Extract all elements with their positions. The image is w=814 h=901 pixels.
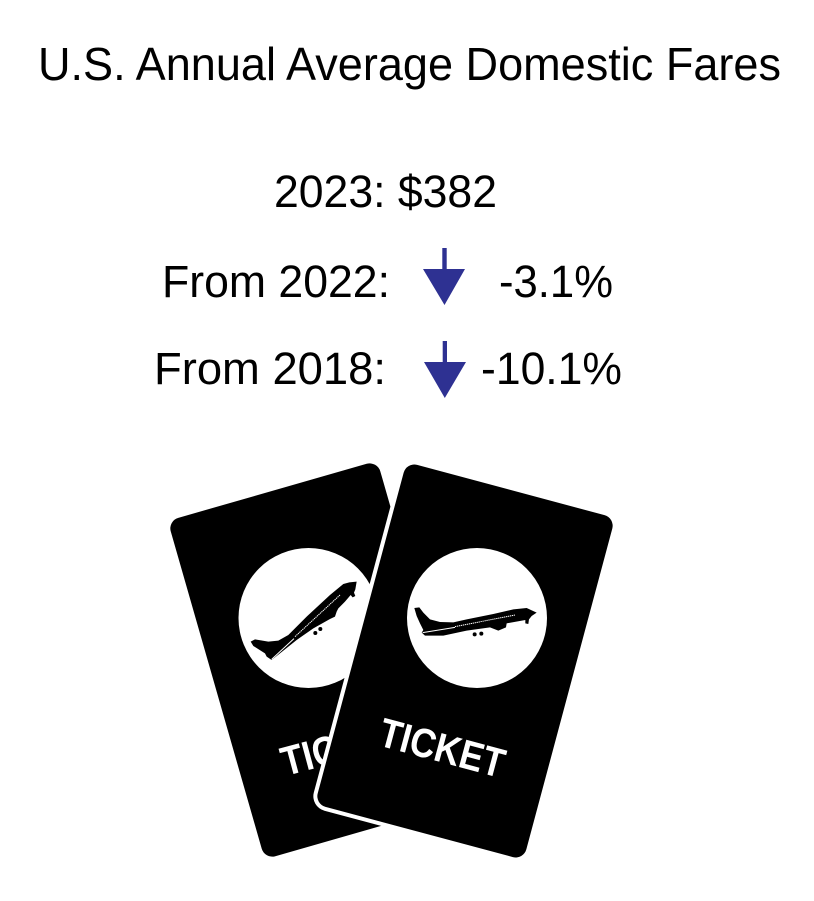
right ticket outline: [310, 457, 620, 865]
icon: two airline tickets: [168, 457, 620, 865]
right ticket label: TICKET: [374, 709, 510, 787]
title: U.S. Annual Average Domestic Fares: [38, 38, 781, 90]
left ticket circle: [238, 548, 378, 688]
icon: down arrow 2022: [423, 248, 465, 305]
left ticket plane: [251, 582, 357, 660]
icon: down arrow 2018: [424, 341, 466, 398]
left ticket: [168, 461, 474, 859]
right ticket circle: [407, 548, 547, 688]
right ticket card: [315, 462, 615, 860]
stat row: change from 2018: [154, 341, 622, 398]
left ticket card: [168, 461, 474, 859]
label: from 2022: From 2022:: [162, 256, 390, 307]
value: -10.1%: -10.1%: [481, 343, 622, 394]
value: -3.1%: -3.1%: [499, 256, 613, 307]
stat row: change from 2022: [162, 248, 613, 307]
right ticket: [310, 457, 620, 865]
stat: 2023 fare: 2023: $382: [274, 166, 497, 217]
left ticket label: TICKET: [276, 707, 412, 785]
label: from 2018: From 2018:: [154, 343, 386, 394]
right ticket plane: [414, 607, 537, 636]
